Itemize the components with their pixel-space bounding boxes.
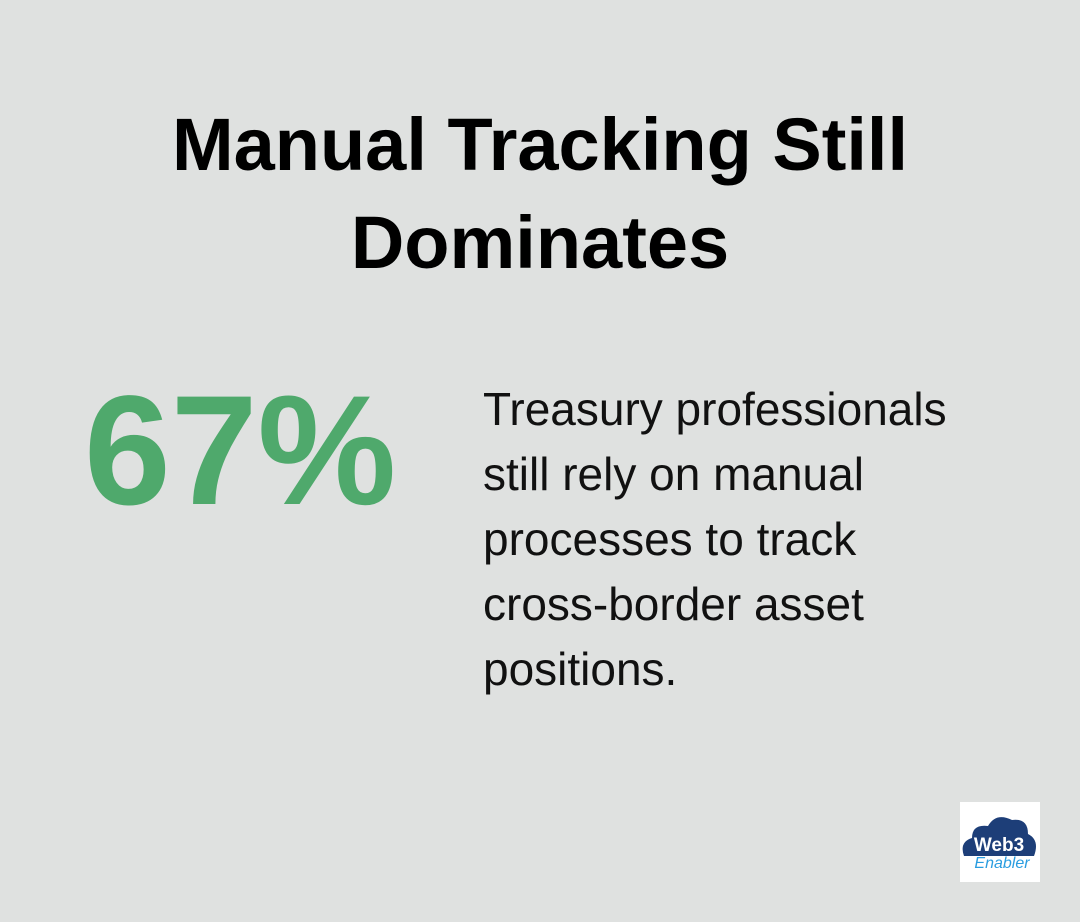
description text: positions.	[483, 643, 677, 695]
icon: Web3 Enabler logo	[960, 802, 1040, 882]
statistic: 67%: 67%	[84, 364, 396, 538]
icon: Web3 Enabler logo: Enabler	[974, 855, 1030, 872]
description text: Treasury professionals	[483, 383, 947, 435]
title	[172, 103, 908, 284]
description text	[483, 383, 947, 695]
title: Manual Tracking Still	[172, 103, 908, 186]
description text: still rely on manual	[483, 448, 864, 500]
description text: processes to track	[483, 513, 856, 565]
title: Dominates	[351, 201, 729, 284]
icon: Web3 Enabler logo: Web3	[974, 835, 1024, 856]
description text: cross-border asset	[483, 578, 864, 630]
